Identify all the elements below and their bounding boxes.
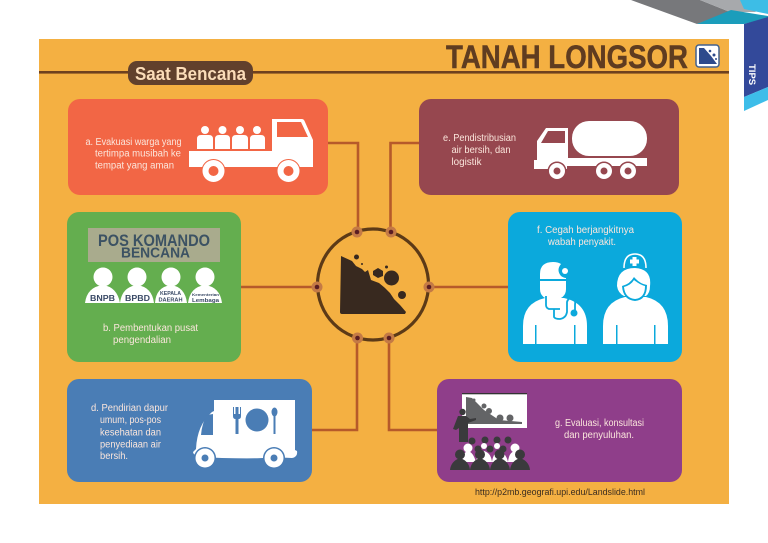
- text e: [443, 133, 516, 168]
- panel b: command post: [67, 212, 241, 362]
- icon: landslide badge: [696, 45, 719, 67]
- text g: dan penyuluhan.: [564, 430, 634, 441]
- text a: [86, 137, 182, 172]
- panel g: evaluation: [437, 379, 682, 482]
- icon: doctor: [523, 262, 587, 344]
- people with agency labels: BPBD: [125, 294, 150, 303]
- text e: e. Pendistribusian: [443, 133, 516, 144]
- text d: [91, 403, 169, 462]
- people with agency labels: KEPALA: [160, 291, 181, 297]
- panel f: disease prevention: [508, 212, 682, 362]
- text b: pengendalian: [113, 335, 171, 346]
- panel e: clean water distribution: [419, 99, 679, 195]
- side tab: TIPS: [744, 17, 768, 111]
- text d: penyediaan air: [100, 440, 162, 450]
- text e: air bersih, dan: [452, 145, 510, 156]
- text a: a. Evakuasi warga yang: [86, 137, 182, 148]
- people with agency labels: [85, 268, 222, 304]
- title: Tanah Longsor: TANAH LONGSOR: [446, 39, 688, 75]
- command post sign: POS KOMANDO: [98, 232, 210, 250]
- panel a: evacuation: [68, 99, 328, 195]
- text a: tertimpa musibah ke: [95, 148, 181, 160]
- source link: http://p2mb.geografi.upi.edu/Landslide.html: [475, 487, 645, 497]
- text g: [555, 418, 644, 441]
- command post sign: [88, 228, 220, 262]
- text d: d. Pendirian dapur: [91, 403, 169, 414]
- orange background panel: [39, 39, 729, 504]
- text d: umum, pos-pos: [100, 415, 161, 426]
- text d: kesehatan dan: [100, 428, 161, 438]
- panel d: public kitchen: [67, 379, 312, 482]
- text b: [103, 323, 198, 346]
- people with agency labels: Kementerian: [192, 293, 219, 297]
- connector lines: [241, 143, 508, 430]
- header rule: [39, 71, 729, 74]
- icon: tanker truck: [534, 121, 647, 180]
- icon: evacuation truck: [189, 119, 313, 183]
- people with agency labels: Lembaga: [192, 298, 220, 304]
- central hub: landslide icon: [312, 226, 434, 344]
- people with agency labels: BNPB: [90, 294, 115, 303]
- text e: logistik: [452, 157, 482, 168]
- text f: f. Cegah berjangkitnya: [537, 225, 634, 236]
- icon: kitchen truck: [193, 400, 297, 469]
- command post sign: BENCANA: [121, 244, 190, 262]
- heading: Saat Bencana: Saat Bencana: [135, 63, 247, 84]
- side tab: TIPS: TIPS: [746, 64, 757, 85]
- people with agency labels: DAERAH: [158, 298, 183, 304]
- text g: g. Evaluasi, konsultasi: [555, 418, 644, 429]
- text f: wabah penyakit.: [547, 237, 616, 248]
- text d: bersih.: [100, 451, 128, 462]
- icon: presenter and audience: [450, 393, 530, 470]
- top right decoration: [631, 0, 768, 24]
- text f: [537, 225, 634, 248]
- text a: tempat yang aman: [95, 160, 174, 172]
- icon: nurse: [603, 254, 668, 344]
- text b: b. Pembentukan pusat: [103, 323, 198, 334]
